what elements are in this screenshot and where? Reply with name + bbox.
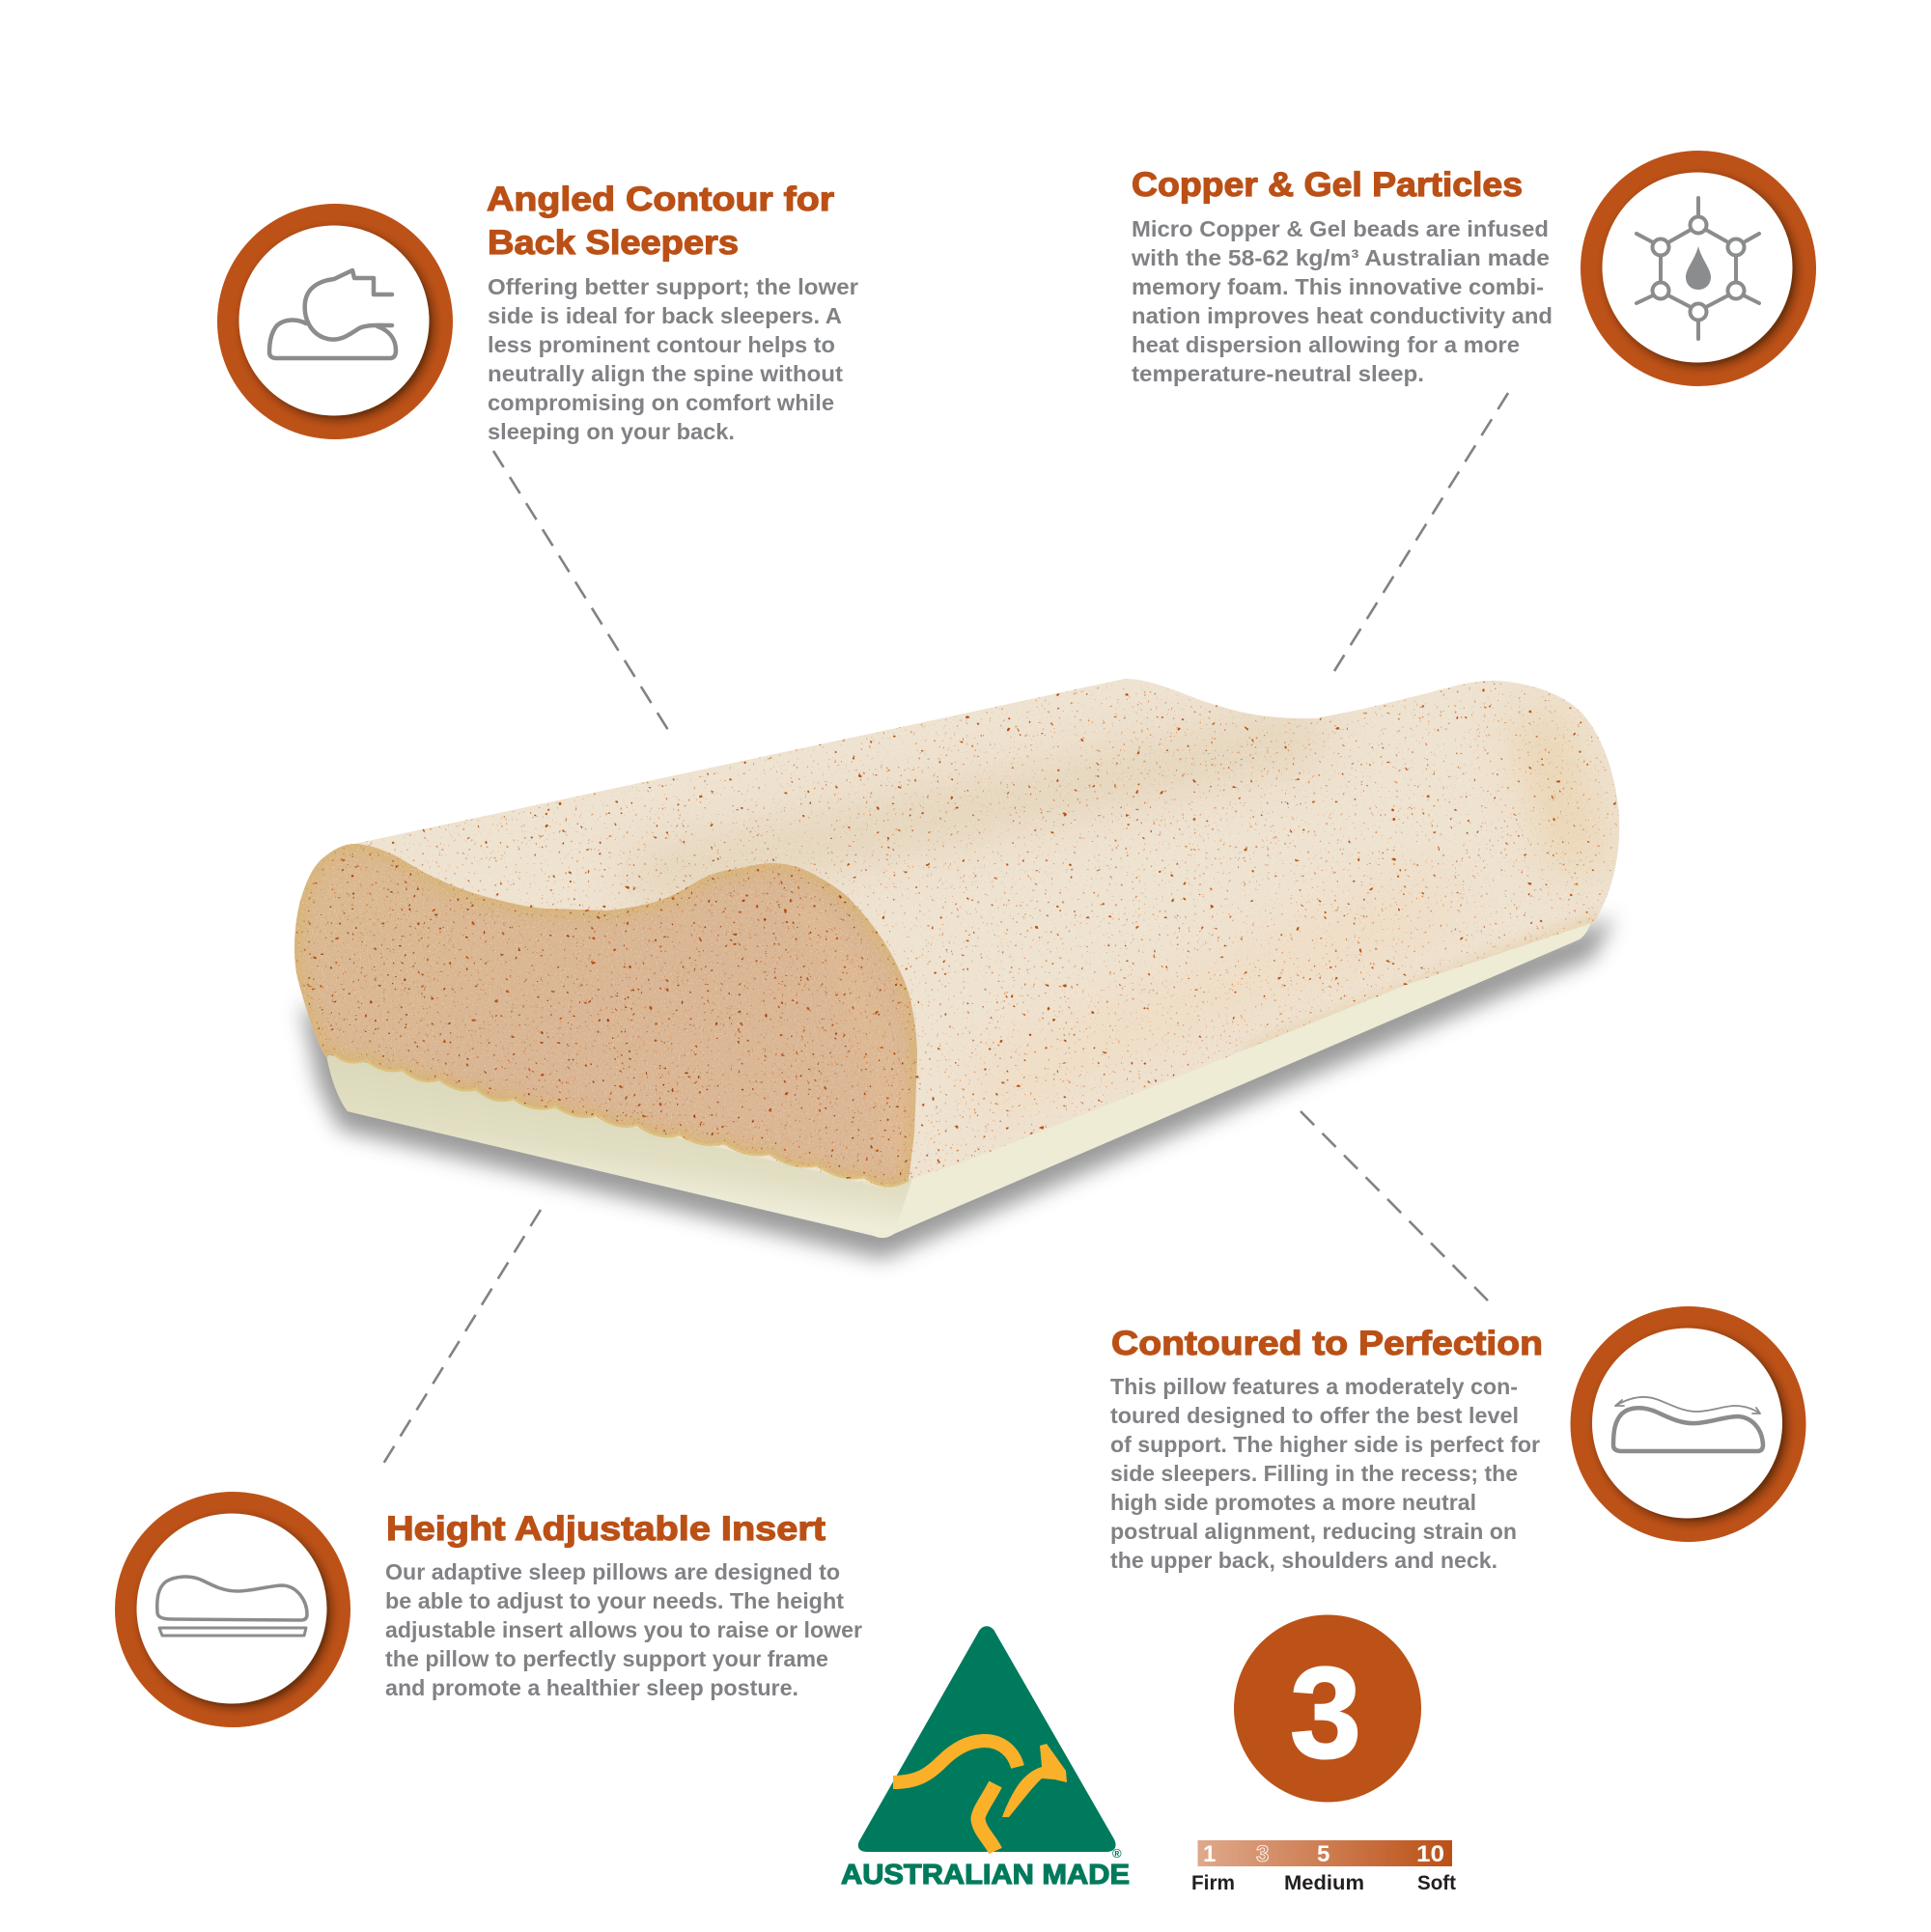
icon badge: molecule with droplet (1581, 151, 1816, 386)
body text: be able to adjust to your needs. The height (385, 1588, 844, 1613)
body text: side sleepers. Filling in the recess; the (1110, 1461, 1518, 1486)
body text: with the 58-62 kg/m³ Australian made (1131, 245, 1550, 270)
dashed connector: copper and gel (1334, 393, 1508, 671)
body text: the pillow to perfectly support your frame (385, 1646, 828, 1671)
heading: Copper & Gel Particles (1132, 166, 1523, 204)
body text: postrual alignment, reducing strain on (1110, 1519, 1517, 1544)
body text: nation improves heat conductivity and (1132, 303, 1553, 328)
firmness scale bar (1197, 1840, 1452, 1867)
pillow illustration (270, 657, 1641, 1259)
body text: adjustable insert allows you to raise or lower (385, 1617, 862, 1642)
body text: and promote a healthier sleep posture. (385, 1675, 798, 1700)
body text (385, 1559, 862, 1700)
green triangle (858, 1626, 1116, 1852)
body text: temperature-neutral sleep. (1132, 361, 1424, 386)
firmness labels: Soft (1417, 1872, 1456, 1894)
body text: Offering better support; the lower (488, 274, 858, 299)
registered mark: ® (1112, 1846, 1122, 1861)
body text: memory foam. This innovative combi- (1132, 274, 1544, 299)
body text (1110, 1374, 1540, 1573)
icon badge: pillow with insert (115, 1492, 350, 1727)
feature: copper and gel particles (1131, 151, 1816, 386)
kangaroo (893, 1741, 1067, 1851)
feature: height adjustable insert (115, 1492, 862, 1727)
heading: Back Sleepers (488, 224, 739, 262)
firmness scale bar: 10 (1416, 1841, 1444, 1867)
firmness scale bar: 3 (1256, 1841, 1269, 1867)
copper speckles (294, 679, 1619, 1189)
rating circle (1234, 1614, 1421, 1802)
body text: toured designed to offer the best level (1110, 1403, 1519, 1428)
feature: angled contour for back sleepers (217, 181, 858, 444)
heading: Height Adjustable Insert (386, 1510, 826, 1548)
body text: Our adaptive sleep pillows are designed to (385, 1559, 840, 1584)
heading: Angled Contour for (487, 181, 834, 218)
body text: of support. The higher side is perfect for (1110, 1432, 1540, 1457)
body text: heat dispersion allowing for a more (1132, 332, 1520, 357)
body text: Micro Copper & Gel beads are infused (1132, 216, 1549, 241)
australian made logo (841, 1626, 1130, 1890)
firmness labels (1191, 1872, 1456, 1894)
front cut face (294, 844, 917, 1188)
body text: This pillow features a moderately con- (1110, 1374, 1518, 1399)
dashed connector: height adjustable insert (383, 1210, 541, 1464)
pillow drop shadow (301, 917, 1614, 1259)
icon badge: contoured pillow with arrow (1570, 1306, 1805, 1542)
height adjustable insert (326, 915, 1593, 1238)
firmness rating (1191, 1614, 1456, 1894)
logo wordmark: AUSTRALIAN MADE (841, 1860, 1130, 1890)
body text (1131, 216, 1553, 386)
heading: Contoured to Perfection (1111, 1325, 1543, 1362)
body text: the upper back, shoulders and neck. (1110, 1548, 1497, 1573)
feature: contoured to perfection (1110, 1306, 1805, 1573)
body text: neutrally align the spine without (488, 361, 843, 386)
firmness labels: Medium (1284, 1872, 1364, 1894)
firmness scale bar: 5 (1317, 1841, 1329, 1867)
copper gel foam top surface (294, 679, 1619, 1189)
body text: high side promotes a more neutral (1110, 1490, 1476, 1515)
body text: sleeping on your back. (488, 419, 735, 444)
heading (487, 181, 834, 262)
rating circle: 3 (1290, 1641, 1361, 1785)
dashed connector: contoured to perfection (1301, 1111, 1488, 1301)
body text: side is ideal for back sleepers. A (488, 303, 842, 328)
firmness scale bar: 1 (1203, 1841, 1216, 1867)
body text (488, 274, 858, 444)
body text: compromising on comfort while (488, 390, 834, 415)
body text: less prominent contour helps to (488, 332, 835, 357)
dashed connector: angled contour (493, 451, 668, 730)
icon badge: head on pillow (217, 204, 453, 439)
firmness labels: Firm (1191, 1872, 1235, 1894)
